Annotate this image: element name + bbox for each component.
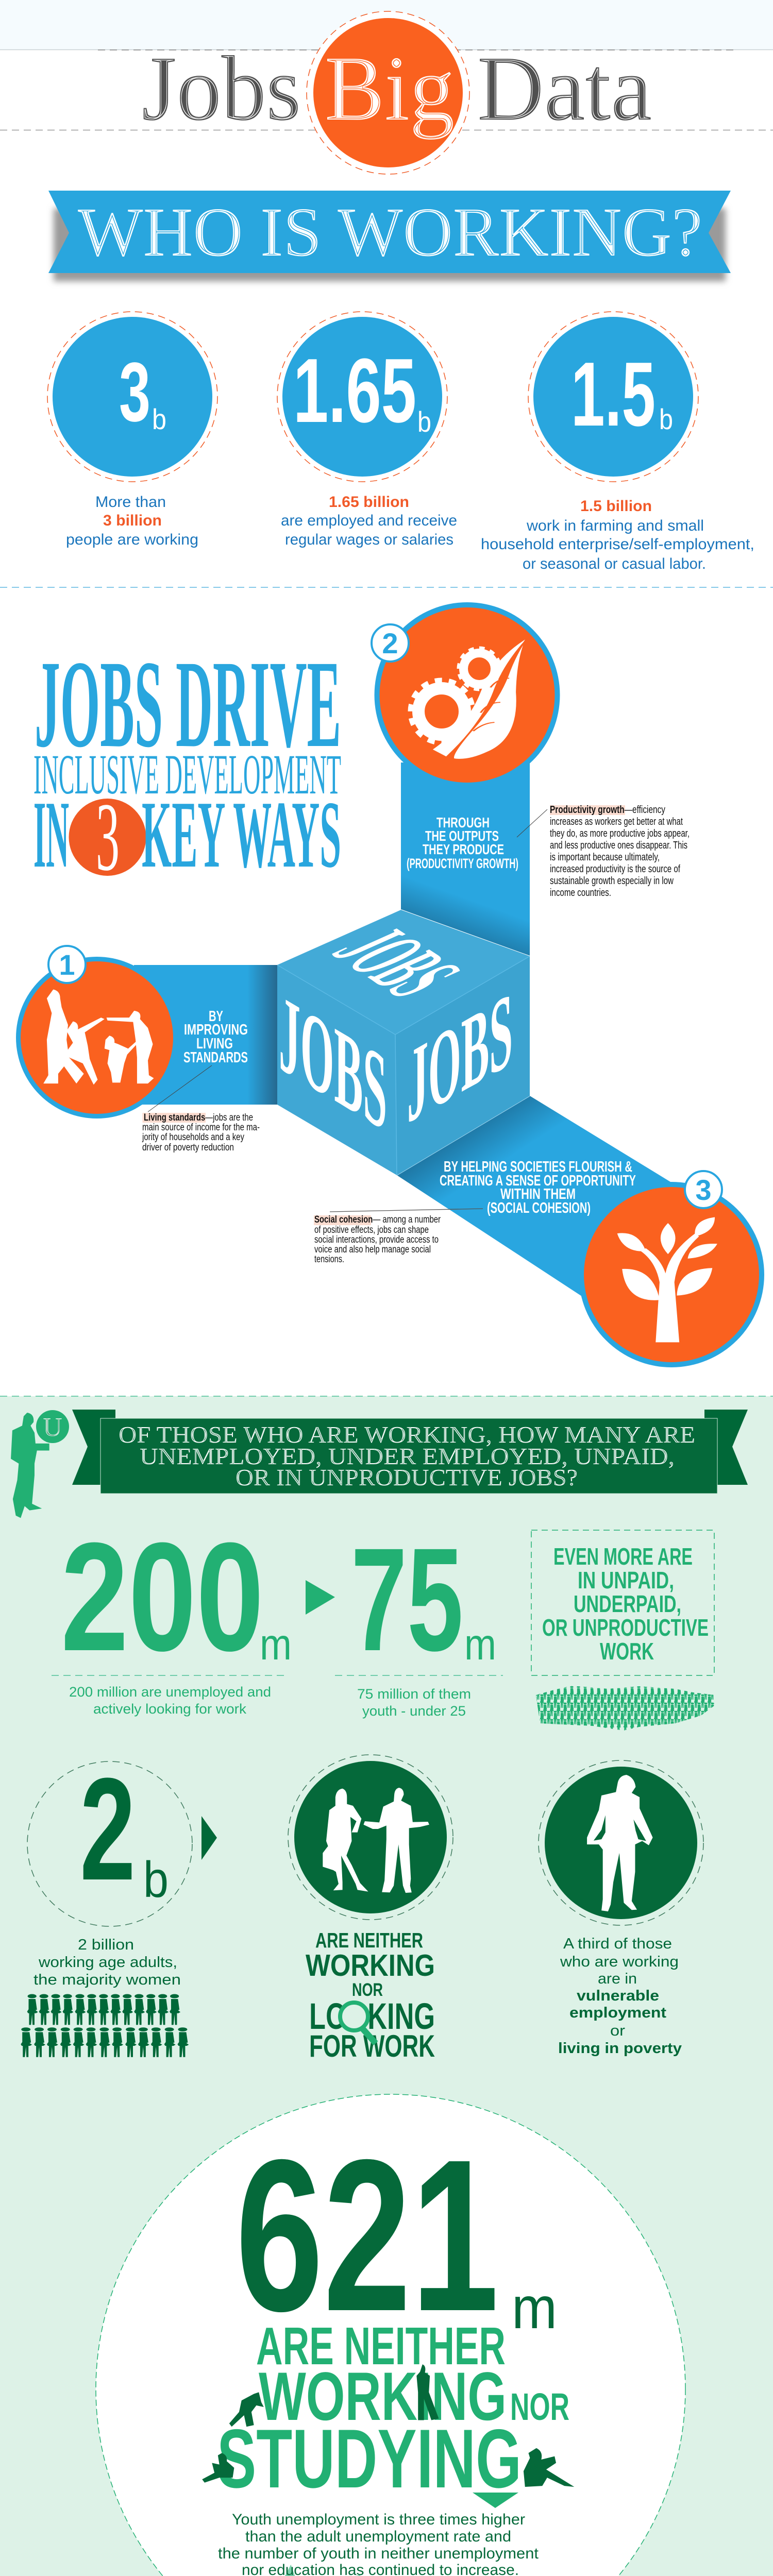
stat: 2 billion: 2 bbox=[80, 1748, 136, 1910]
text: productivity growth: Productivity growth—efficiency bbox=[550, 804, 665, 816]
icon: figures on letters bbox=[202, 2364, 574, 2487]
stat: 1.65 billion: are employed and receive bbox=[281, 512, 457, 529]
text: a third: who are working bbox=[560, 1954, 679, 1970]
header band bbox=[0, 0, 773, 130]
callout: even more: OR UNPRODUCTIVE bbox=[542, 1614, 709, 1641]
text: neither working nor looking: FOR WORK bbox=[309, 2029, 435, 2063]
band 2: productivity: THEY PRODUCE bbox=[423, 841, 504, 857]
text: neither working nor looking: NOR bbox=[352, 1980, 383, 2000]
badge 3 bbox=[685, 1171, 722, 1208]
icon: man with magnifier bbox=[11, 1410, 69, 1518]
text: productivity growth: increased productivity is the source of bbox=[550, 863, 680, 875]
crowd icon bbox=[533, 1686, 715, 1733]
stat: 2 billion: 2 billion bbox=[78, 1937, 134, 1953]
text: a third bbox=[558, 1936, 682, 2057]
text: social cohesion bbox=[314, 1209, 483, 1265]
green banner: OR IN UNPRODUCTIVE JOBS? bbox=[236, 1464, 578, 1490]
text: a third: employment bbox=[569, 2005, 666, 2021]
circle 2: gears and leaf icon bbox=[374, 602, 560, 788]
title: Jobs Big Data: Jobs bbox=[142, 37, 301, 140]
icon: women silhouettes bbox=[21, 1994, 189, 2057]
stat: 1.5 billion: 1.5 bbox=[571, 343, 656, 445]
big circle: 621 million: m bbox=[512, 2275, 557, 2341]
text: living standards bbox=[142, 1065, 260, 1153]
big circle: 621 million bbox=[96, 2094, 685, 2576]
badge 1: 1 bbox=[59, 948, 75, 981]
icon: gears bbox=[410, 648, 500, 743]
stat: 3 billion: More than bbox=[95, 494, 166, 511]
circle: empty pockets icon bbox=[539, 1760, 703, 1925]
badge 2 bbox=[372, 624, 409, 662]
stat: 3 billion bbox=[47, 312, 217, 548]
text: neither working nor looking: WORKING bbox=[306, 1948, 435, 1982]
stat: 1.5 billion: household enterprise/self-employment, bbox=[481, 536, 754, 553]
band 2: productivity: THROUGH bbox=[436, 815, 490, 831]
text: neither working nor looking bbox=[306, 1928, 435, 2063]
band 1: living standards: BY bbox=[209, 1008, 223, 1025]
band 3: social cohesion: WITHIN THEM bbox=[500, 1186, 576, 1202]
text: social cohesion: social interactions, provide access to bbox=[314, 1234, 439, 1245]
heading: jobs drive inclusive development: IN bbox=[33, 782, 69, 888]
stat: 3 billion: 3 bbox=[119, 345, 150, 439]
big circle: 621 million: 621 bbox=[236, 2115, 499, 2357]
text: living standards: Living standards—jobs are the bbox=[144, 1112, 253, 1123]
stat: 3 billion: 3 billion bbox=[103, 512, 162, 529]
text: productivity growth: sustainable growth especially in low bbox=[550, 875, 674, 887]
band 3: social cohesion: BY HELPING SOCIETIES FLOURISH & bbox=[444, 1159, 632, 1175]
stat: 1.65 billion: regular wages or salaries bbox=[285, 531, 453, 548]
arrow bbox=[473, 2493, 518, 2508]
text: JOBS DRIVE bbox=[35, 634, 341, 773]
orange number 3 bbox=[69, 783, 146, 891]
icon: tree bbox=[617, 1217, 717, 1342]
green section background bbox=[0, 1396, 773, 2576]
stat: 75 million youth: 75 bbox=[351, 1518, 463, 1682]
text: living standards: driver of poverty reduction bbox=[142, 1142, 234, 1153]
heading: jobs drive inclusive development bbox=[33, 634, 341, 891]
callout: even more: IN UNPAID, bbox=[578, 1567, 674, 1594]
big circle: 621 million: ARE NEITHER bbox=[256, 2316, 506, 2376]
band 2: productivity: (PRODUCTIVITY GROWTH) bbox=[407, 856, 518, 871]
arrow bbox=[201, 1816, 217, 1860]
text: a third: A third of those bbox=[563, 1936, 672, 1952]
stat: 1.5 billion: or seasonal or casual labor. bbox=[523, 555, 706, 572]
text: productivity growth: increases as workers get better at what bbox=[550, 816, 683, 827]
stat: 75 million youth bbox=[335, 1518, 503, 1719]
text: neither working nor looking: LOOKING bbox=[309, 1996, 435, 2037]
text: productivity growth: and less productive ones disappear. This bbox=[550, 840, 687, 851]
stat: 75 million youth: 75 million of them bbox=[357, 1686, 471, 1702]
text: productivity growth bbox=[517, 804, 690, 899]
big circle: 621 million: Youth unemployment is three times higher bbox=[232, 2511, 525, 2528]
circle 1: family icon bbox=[16, 957, 178, 1118]
text: JOBS bbox=[407, 969, 513, 1146]
text: a third: are in bbox=[598, 1971, 637, 1987]
stat: 1.65 billion: 1.65 billion bbox=[329, 494, 409, 511]
big circle: 621 million: than the adult unemployment rate and bbox=[245, 2528, 511, 2545]
band 1: living standards: IMPROVING bbox=[184, 1022, 248, 1038]
title: Jobs Big Data: Data bbox=[477, 37, 652, 140]
icon: leaf bbox=[433, 639, 527, 759]
icon: family silhouettes bbox=[43, 990, 154, 1084]
big circle: 621 million: the number of youth in neither unemployment bbox=[218, 2545, 539, 2562]
callout: even more: UNDERPAID, bbox=[574, 1590, 681, 1617]
text: social cohesion: voice and also help manage social bbox=[314, 1244, 431, 1255]
badge 3: 3 bbox=[695, 1174, 712, 1206]
green banner: UNEMPLOYED, UNDER EMPLOYED, UNPAID, bbox=[140, 1443, 675, 1469]
orange title circle: Big bbox=[325, 37, 455, 140]
cube: jobs jobs jobs: JOBS bbox=[279, 970, 387, 1155]
stat: 1.65 billion: b bbox=[417, 405, 431, 438]
stat: 75 million youth: youth - under 25 bbox=[362, 1703, 466, 1719]
text: living standards: main source of income for the ma- bbox=[142, 1122, 260, 1133]
band 1: living standards bbox=[134, 965, 277, 1105]
stat: 2 billion: working age adults, bbox=[38, 1954, 177, 1971]
band 3: social cohesion bbox=[397, 1096, 680, 1296]
green banner: OF THOSE WHO ARE WORKING, HOW MANY ARE bbox=[119, 1421, 695, 1448]
badge 1 bbox=[48, 946, 86, 983]
text: a third: or bbox=[610, 2023, 625, 2039]
stat: 1.5 billion bbox=[481, 312, 754, 572]
text: neither working nor looking: ARE NEITHER bbox=[315, 1928, 423, 1952]
title: Jobs Big Data bbox=[142, 11, 652, 174]
text: living standards: jority of households and a key bbox=[142, 1132, 244, 1143]
stat: 200 million: m bbox=[260, 1620, 292, 1669]
text: INCLUSIVE DEVELOPMENT bbox=[33, 743, 341, 806]
stat: 200 million: 200 bbox=[61, 1510, 264, 1683]
stat: 75 million youth: m bbox=[464, 1620, 496, 1669]
badge 2: 2 bbox=[382, 627, 398, 659]
big circle: 621 million: STUDYING bbox=[217, 2412, 522, 2505]
text: a third: vulnerable bbox=[577, 1988, 659, 2004]
stat: 1.65 billion bbox=[277, 312, 457, 548]
cube: jobs jobs jobs bbox=[277, 910, 530, 1175]
band 1: living standards: LIVING bbox=[196, 1036, 233, 1052]
band 3: social cohesion: (SOCIAL COHESION) bbox=[487, 1200, 591, 1216]
band 3: social cohesion: CREATING A SENSE OF OPPORTUNITY bbox=[440, 1173, 636, 1189]
green banner bbox=[72, 1410, 748, 1494]
icon: magnifier bbox=[340, 2003, 376, 2043]
callout: even more bbox=[531, 1530, 714, 1675]
text: a third: living in poverty bbox=[558, 2040, 682, 2057]
crowd with raised hands bbox=[285, 2565, 360, 2576]
stat: 3 billion: b bbox=[152, 403, 166, 435]
stat: 2 billion: b bbox=[143, 1851, 169, 1908]
band 1: living standards: STANDARDS bbox=[183, 1049, 248, 1066]
icon: man with magnifier: U bbox=[43, 1413, 62, 1442]
stat: 2 billion: the majority women bbox=[33, 1972, 181, 1988]
text: productivity growth: is important because ultimately, bbox=[550, 852, 660, 863]
arrow bbox=[306, 1580, 335, 1615]
cube: jobs jobs jobs: JOBS bbox=[310, 916, 486, 1009]
stat: 2 billion bbox=[27, 1748, 192, 1988]
stat: 1.5 billion: b bbox=[659, 403, 673, 435]
text: productivity growth: income countries. bbox=[550, 887, 611, 899]
stat: 1.65 billion: 1.65 bbox=[293, 340, 416, 442]
text: social cohesion: Social cohesion— among a number bbox=[314, 1214, 441, 1225]
text: social cohesion: tensions. bbox=[314, 1254, 344, 1265]
orange title circle bbox=[307, 11, 469, 174]
text: productivity growth: they do, as more productive jobs appear, bbox=[550, 828, 690, 839]
circle 3: tree icon bbox=[579, 1182, 764, 1367]
text: social cohesion: of positive effects, jobs can shape bbox=[314, 1225, 429, 1235]
callout: even more: EVEN MORE ARE bbox=[553, 1543, 693, 1570]
stat: 200 million: 200 million are unemployed and bbox=[69, 1684, 271, 1700]
band 2: productivity: THE OUTPUTS bbox=[425, 828, 499, 844]
orange number 3: 3 bbox=[96, 783, 120, 891]
big circle: 621 million: WORKING bbox=[259, 2359, 507, 2435]
stat: 1.5 billion: work in farming and small bbox=[526, 517, 704, 534]
stat: 3 billion: people are working bbox=[66, 531, 198, 548]
band 2: productivity bbox=[401, 762, 530, 956]
big circle: 621 million: NOR bbox=[510, 2385, 569, 2428]
circle: couple icon bbox=[288, 1755, 453, 1920]
text: KEY WAYS bbox=[142, 782, 341, 888]
stat: 200 million: actively looking for work bbox=[93, 1701, 247, 1717]
banner: who is working: WHO IS WORKING? bbox=[78, 194, 702, 271]
callout: even more: WORK bbox=[600, 1638, 654, 1665]
stat: 1.5 billion: 1.5 billion bbox=[580, 498, 652, 515]
